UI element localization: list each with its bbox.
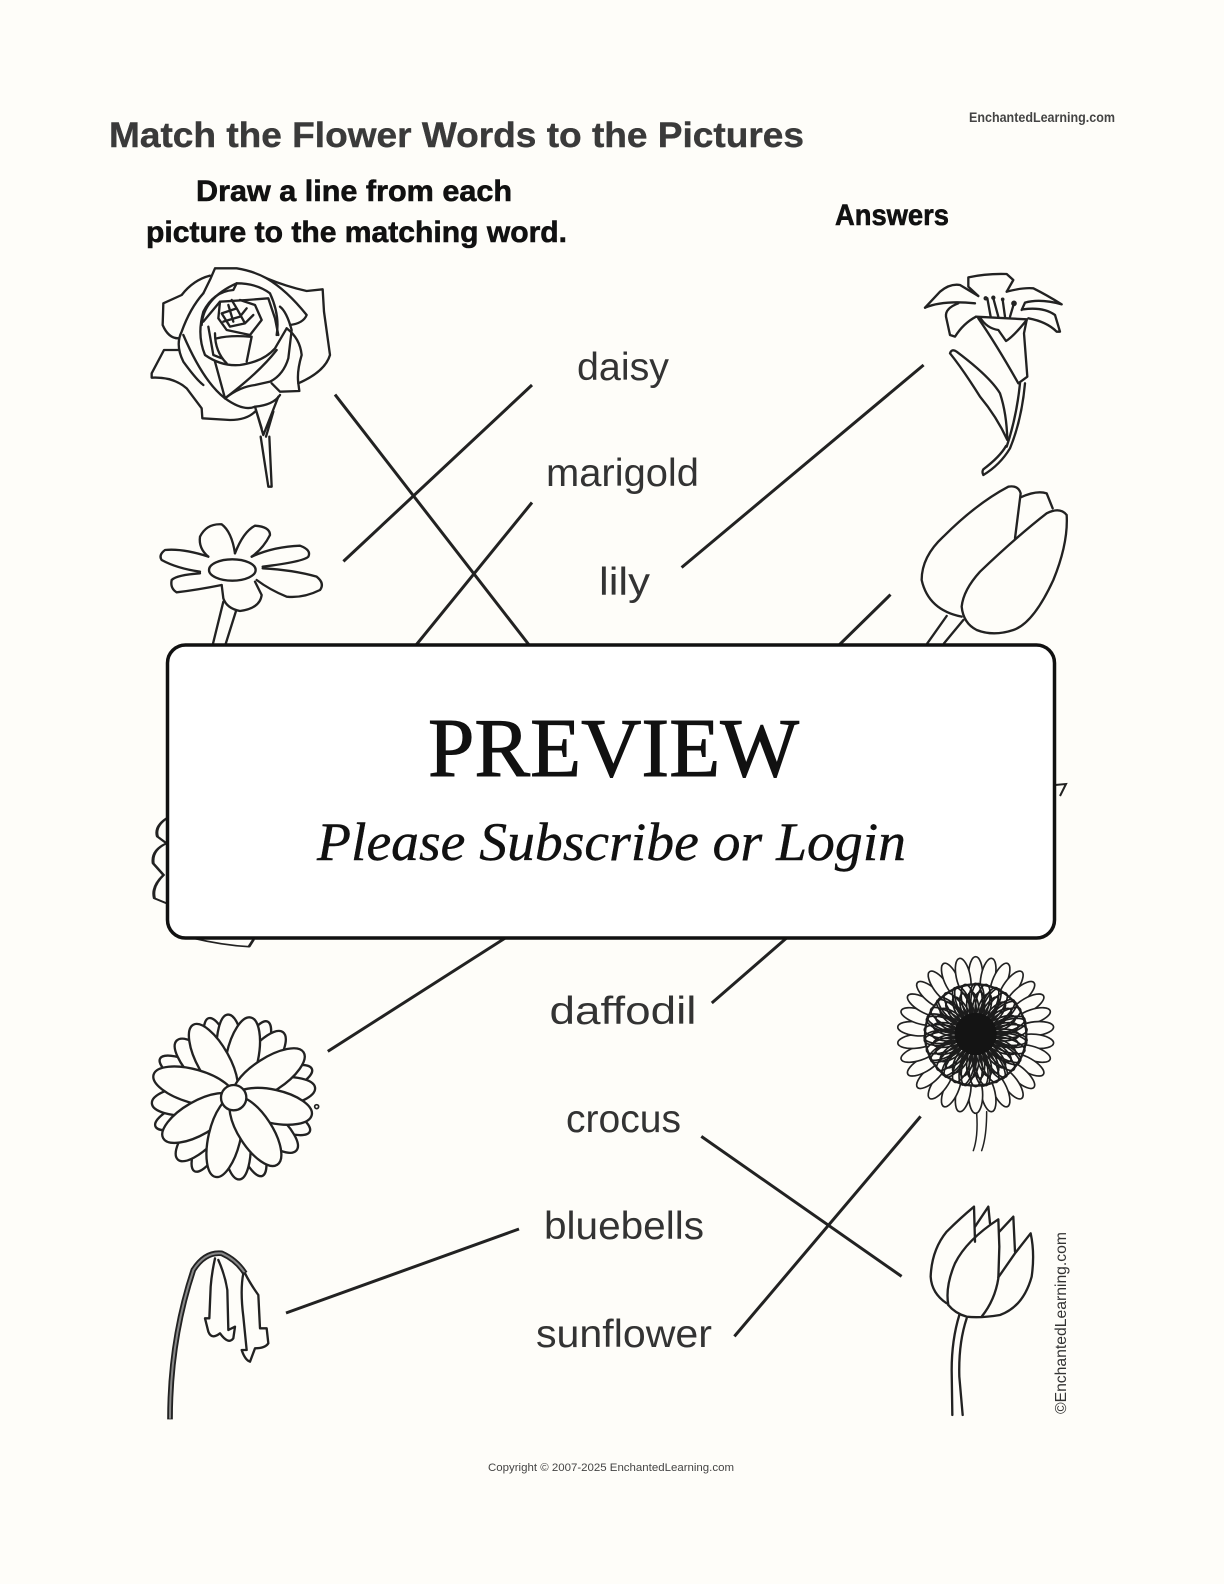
icon: crocus [931, 1207, 1033, 1415]
word list: marigold [546, 452, 699, 495]
word list: bluebells [544, 1205, 704, 1248]
answer lines [286, 365, 924, 1336]
instructions: Draw a line from each [196, 175, 512, 208]
answers heading: Answers [835, 199, 949, 232]
instructions [146, 175, 567, 249]
footer copyright: Copyright © 2007-2025 EnchantedLearning.com [488, 1462, 734, 1474]
word list: lily [599, 561, 651, 604]
subscribe message: Please Subscribe or Login [316, 812, 906, 872]
word list: daisy [577, 346, 670, 389]
word list [536, 346, 712, 1356]
word list: crocus [566, 1098, 681, 1141]
icon: tulip [922, 486, 1067, 643]
site name: EnchantedLearning.com [969, 110, 1115, 125]
icon: sunflower [897, 957, 1054, 1151]
icon: lily [925, 274, 1062, 475]
icon: hidden flower fragment left [153, 818, 253, 947]
icon: hidden flower fragment right [1055, 784, 1066, 796]
word list: daffodil [550, 990, 696, 1033]
icon: bluebells [170, 1253, 268, 1419]
title: Match the Flower Words to the Pictures [109, 116, 804, 155]
vertical copyright: ©EnchantedLearning.com [1053, 1232, 1070, 1414]
preview heading: PREVIEW [428, 702, 800, 795]
word list: sunflower [536, 1313, 712, 1356]
icon: marigold [149, 1014, 319, 1181]
icon: rose [152, 268, 330, 487]
icon: daisy [161, 524, 322, 645]
instructions: picture to the matching word. [146, 216, 567, 249]
panel: preview overlay [168, 645, 1054, 938]
